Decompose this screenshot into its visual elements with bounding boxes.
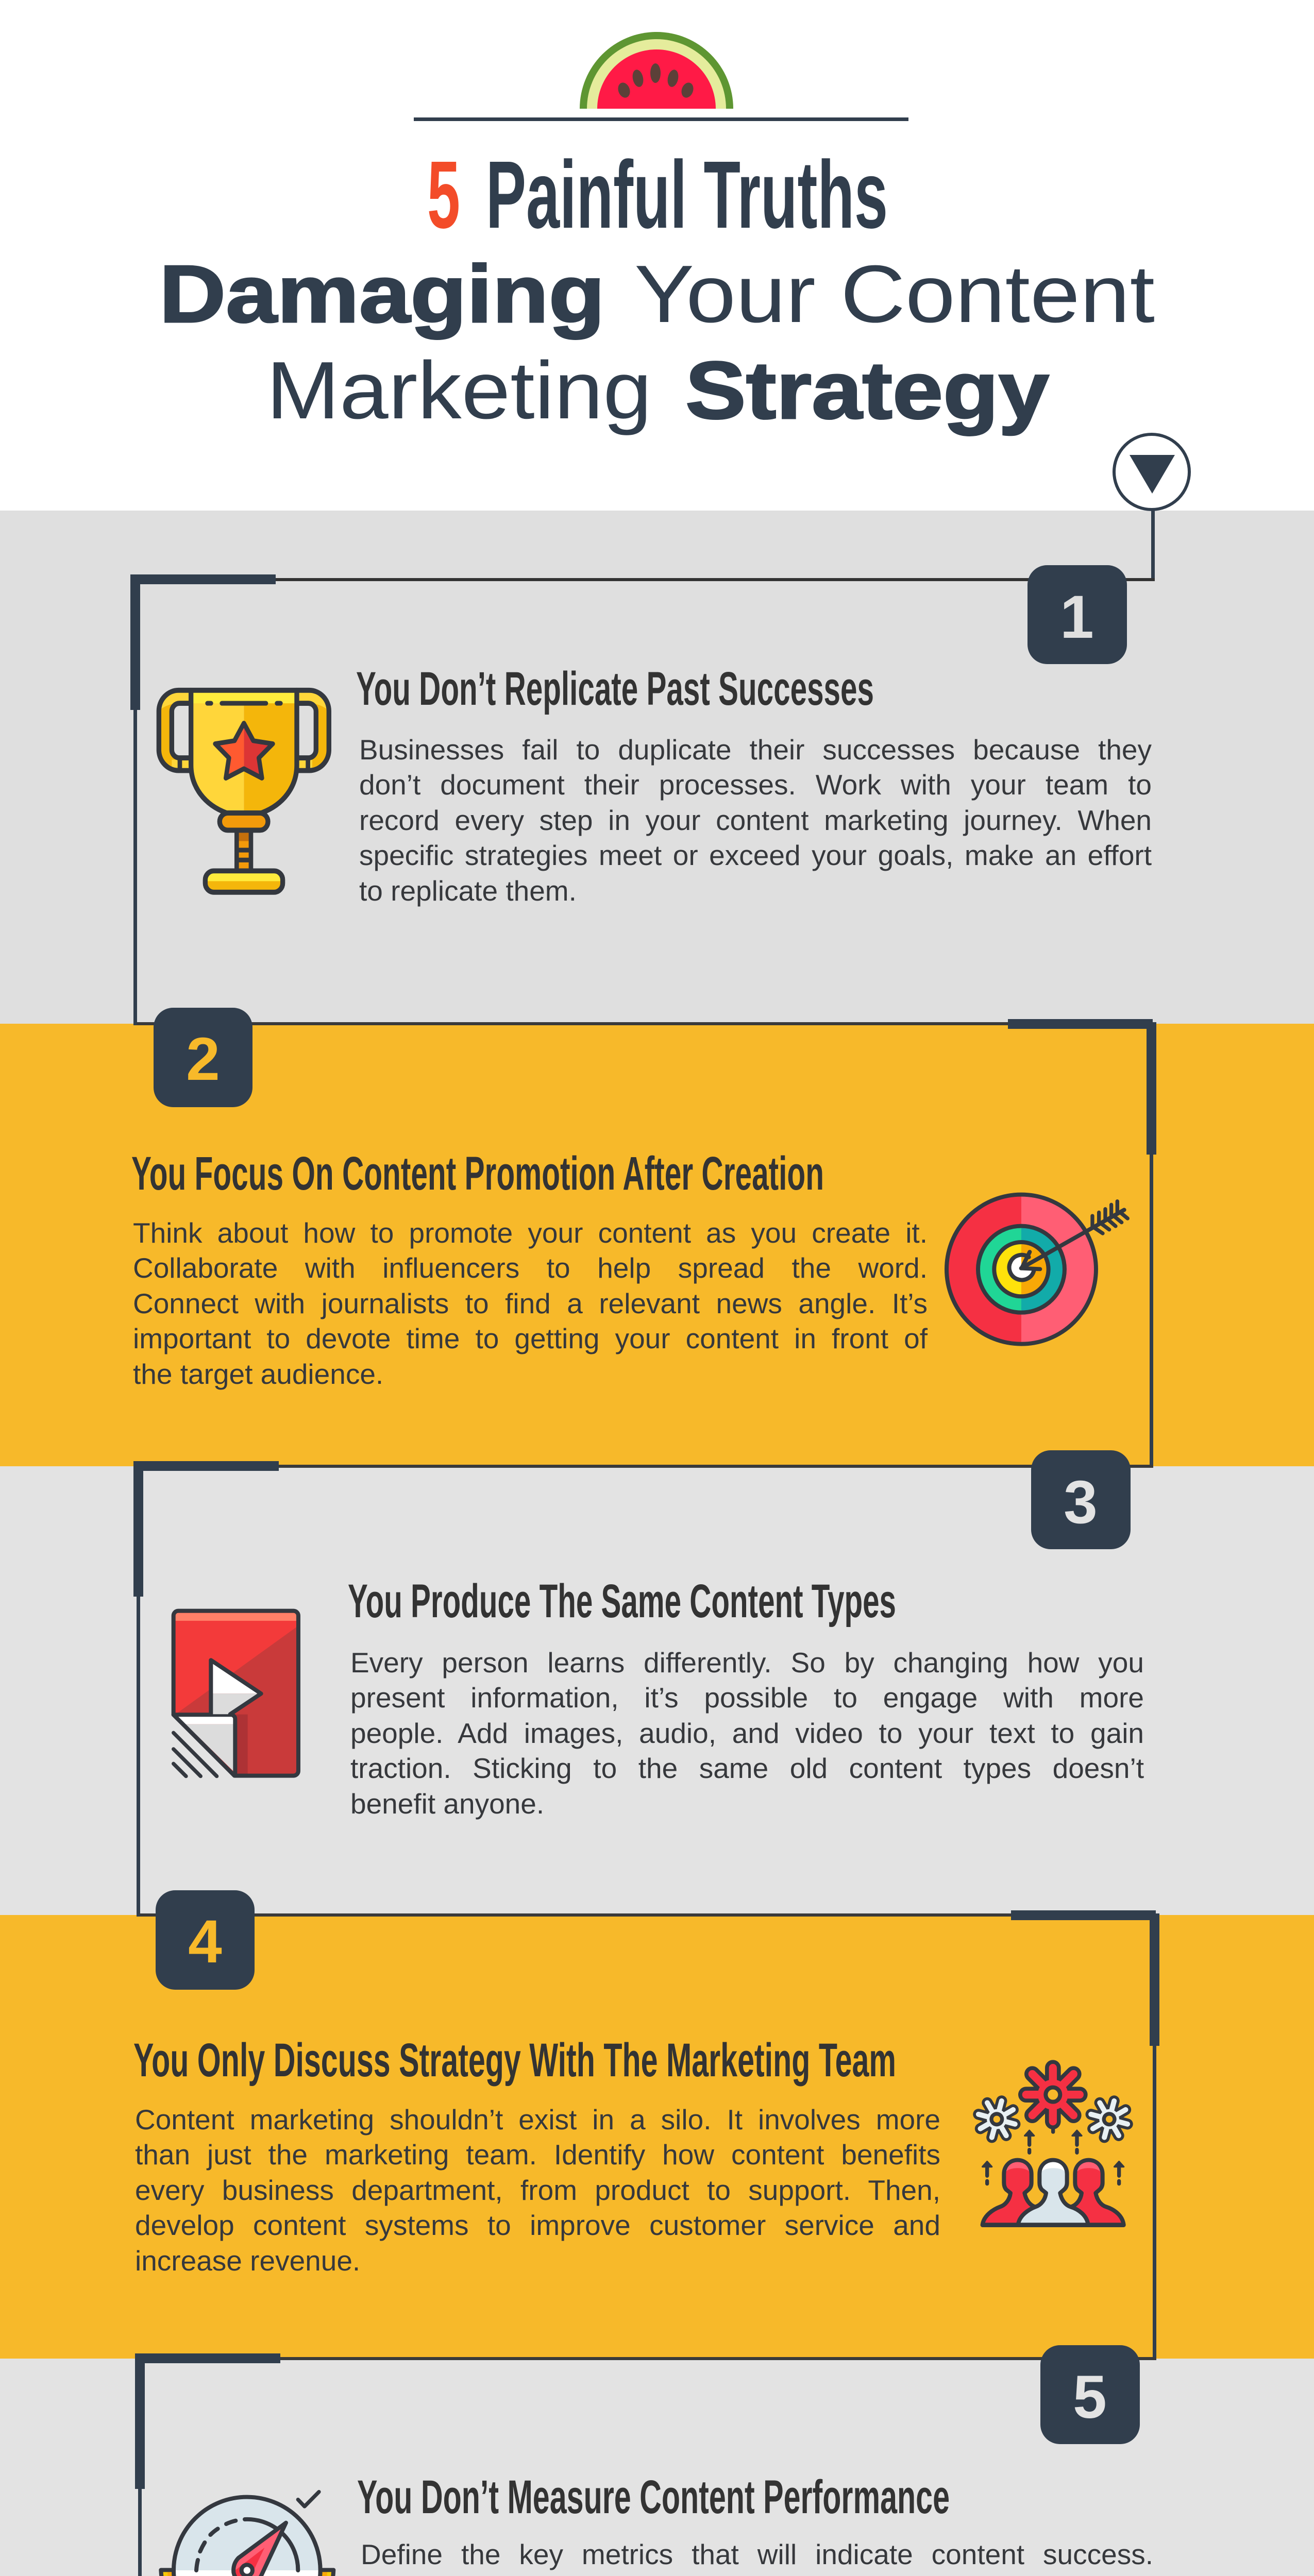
text block: section 1 body [359,734,1152,907]
text block: section 4 body: every business department, from product to support. Then, [135,2174,940,2206]
icon: watermelon [580,32,733,109]
connector: section 2 [137,1019,1156,1468]
panel: 2 promotion after creation [0,1024,1314,1466]
text block: section 4 body: than just the marketing team. Identify how content benefits [135,2139,940,2171]
text block: section 2 body [133,1217,928,1390]
text block: section 1 body: specific strategies meet or exceed your goals, make an effort [359,839,1152,871]
title line 3: Strategy [685,345,1049,436]
panel: 5 measure performance [0,2359,1314,2576]
title line 2: Damaging [159,249,605,340]
connector: section 4 [140,1910,1159,2360]
text block: section 4 body: Content marketing shouldn’t exist in a silo. It involves more [135,2104,940,2136]
panel: 4 strategy with marketing team [0,1915,1314,2359]
icon: target with arrow [947,1195,1127,1344]
panel: 3 same content types [0,1466,1314,1915]
text block: section 2 body: Collaborate with influencers to help spread the word. [133,1252,928,1284]
text block: section 1 body: Businesses fail to duplicate their successes because they [359,734,1152,766]
icon: team and gears [973,2068,1133,2225]
text block: section 3 body: present information, it’s possible to engage with more [350,1682,1144,1714]
title line 2: Your Content [634,249,1155,340]
badge 3 [1031,1450,1131,1549]
heading: you don't measure content performance: You Don’t Measure Content Performance [357,2471,950,2523]
text block: section 4 body [135,2104,940,2277]
text block: section 5 body: Define the key metrics that will indicate content success. [361,2538,1153,2570]
title line 3: Marketing [266,345,652,436]
text block: section 1 body: to replicate them. [359,875,577,907]
text block: section 3 body [350,1647,1144,1820]
title line 3 [266,345,1049,436]
title line 1: 5 [427,142,460,248]
text block: section 4 body: increase revenue. [135,2245,360,2277]
text block: section 3 body: people. Add images, audio, and video to your text to gain [350,1717,1144,1749]
icon: video document [173,1611,298,1778]
text block: section 2 body: Connect with journalists to find a relevant news angle. It’s [133,1287,928,1319]
badge 5: 5 [1073,2363,1107,2431]
badge 1: 1 [1060,583,1094,651]
text block: section 4 body: develop content systems to improve customer service and [135,2209,940,2241]
title line 1 [427,142,888,248]
text block: section 1 body: don’t document their processes. Work with your team to [359,769,1152,801]
text block: section 1 body: record every step in your content marketing journey. When [359,804,1152,836]
connector: section 1 [130,574,1155,1025]
start marker: circle with down triangle [1114,434,1189,581]
heading: you produce the same content types: You Produce The Same Content Types [348,1575,896,1628]
panel: title header [0,0,1314,511]
connector: section 5 [135,2353,1156,2576]
badge 2 [154,1008,252,1107]
text block: section 3 body: benefit anyone. [350,1788,544,1820]
heading: you focus on content promotion after creation: You Focus On Content Promotion After Creation [131,1147,824,1200]
heading: you don't replicate past successes: You Don’t Replicate Past Successes [356,663,874,715]
icon: trophy [159,690,329,892]
text block: section 3 body: traction. Sticking to the same old content types doesn’t [350,1752,1144,1784]
badge 2: 2 [186,1025,220,1093]
panel: 1 replicate past successes [0,511,1314,1024]
badge 1 [1027,565,1127,664]
icon: gauge [161,2492,333,2576]
title line 1: Painful Truths [486,142,888,248]
text block: section 2 body: important to devote time to getting your content in front of [133,1323,928,1354]
badge 3: 3 [1064,1468,1098,1536]
connector: section 3 [133,1461,1153,1917]
text block: section 2 body: Think about how to promote your content as you create it. [133,1217,928,1249]
title line 2 [159,249,1155,340]
text block: section 2 body: the target audience. [133,1358,383,1390]
divider line under watermelon [414,117,908,121]
badge 4: 4 [188,1908,222,1976]
badge 4 [156,1890,255,1990]
heading: you only discuss strategy with the marketing team: You Only Discuss Strategy With The Marketing Team [133,2034,896,2087]
badge 5 [1040,2345,1140,2444]
text block: section 3 body: Every person learns differently. So by changing how you [350,1647,1144,1679]
